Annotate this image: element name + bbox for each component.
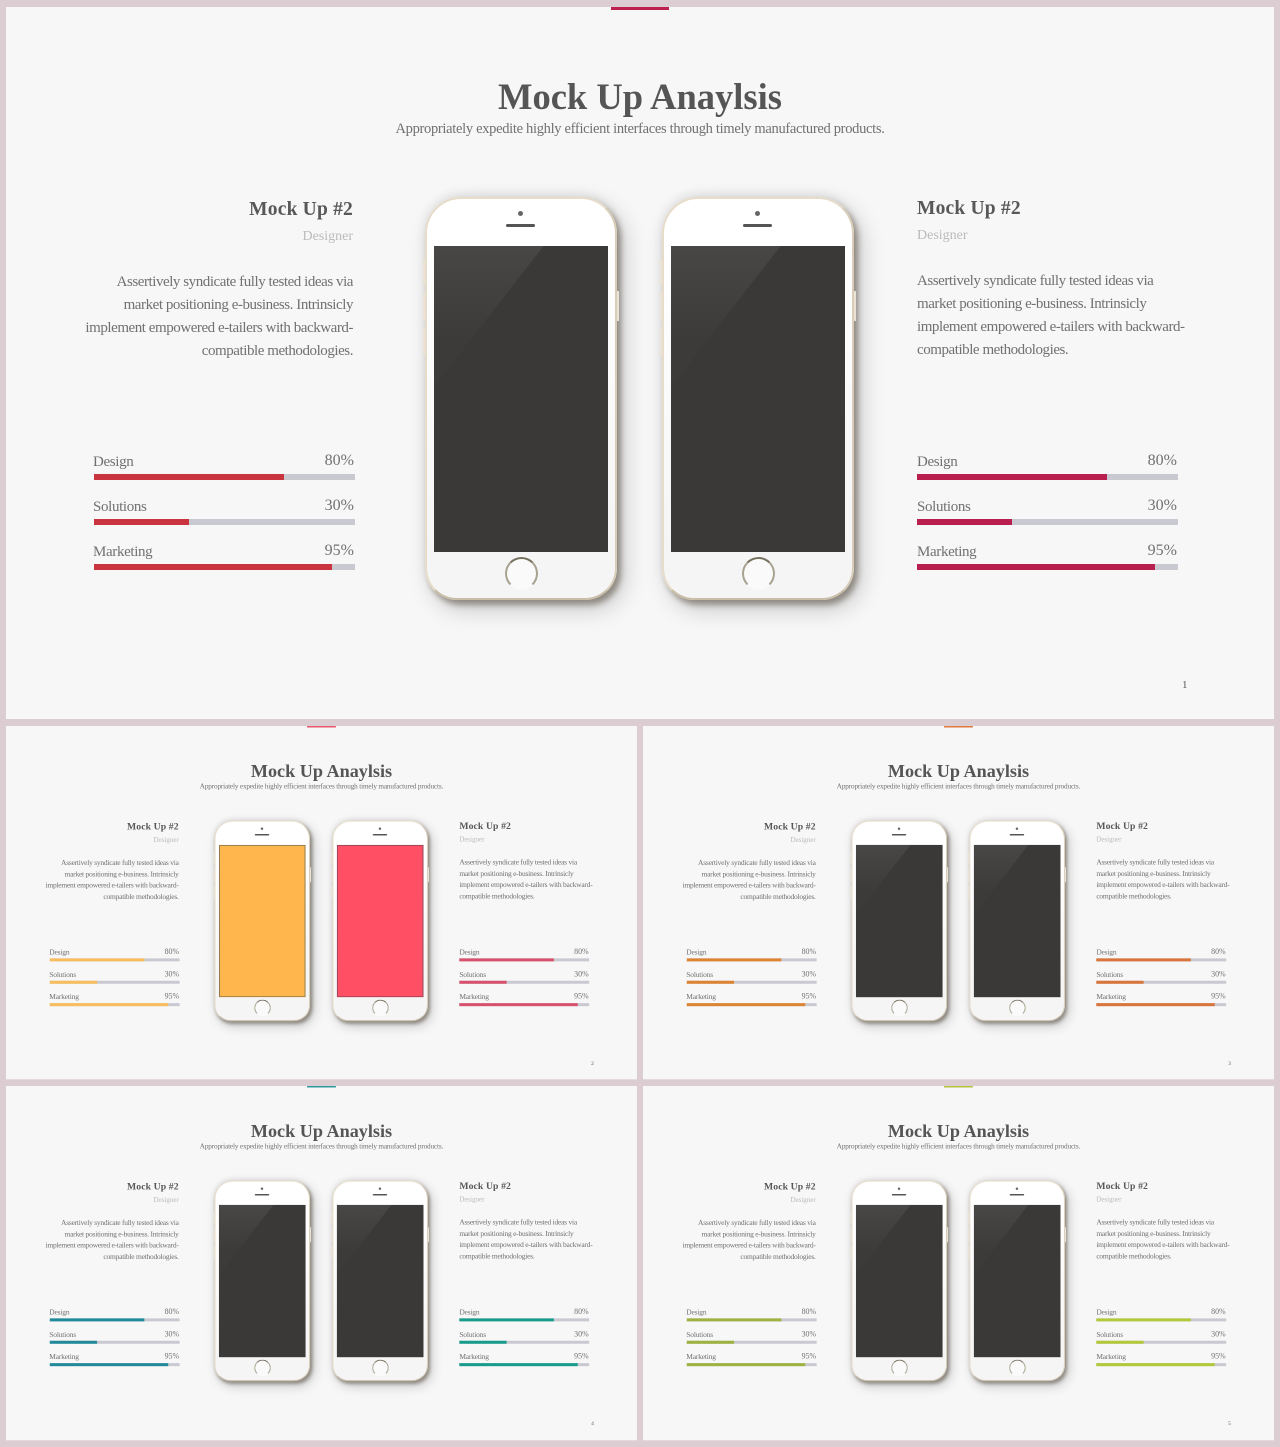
page number: 2 <box>591 1060 594 1066</box>
left profile text: implement empowered e-tailers with backward- <box>46 1242 179 1250</box>
right profile text: implement empowered e-tailers with backward- <box>459 1241 592 1249</box>
right profile text: Assertively syndicate fully tested ideas via <box>917 273 1153 289</box>
right skill bars <box>459 1307 590 1366</box>
subtitle: Appropriately expedite highly efficient interfaces through timely manufactured products. <box>837 1143 1080 1151</box>
left skill bars: 30% <box>165 970 179 978</box>
right skill bars: 95% <box>574 1352 589 1361</box>
phone mockup right <box>969 821 1065 1021</box>
left skill bars: 80% <box>802 1307 816 1316</box>
left profile text: market positioning e-business. Intrinsicly <box>702 1230 816 1238</box>
left profile text: Mock Up #2 <box>127 1182 179 1192</box>
right profile text <box>459 821 592 901</box>
right skill bars: Marketing <box>459 1353 489 1361</box>
page number: 5 <box>1228 1420 1231 1426</box>
accent tab <box>611 7 669 10</box>
panel: slide 4 <box>6 1086 637 1440</box>
left skill bars: Solutions <box>686 1331 713 1339</box>
page number: 1 <box>1182 679 1188 691</box>
left profile text: Assertively syndicate fully tested ideas via <box>698 859 816 867</box>
left skill bars <box>93 452 355 570</box>
left skill bars: Solutions <box>686 971 713 979</box>
phone mockup left <box>851 821 947 1021</box>
right profile text: Designer <box>1096 1196 1121 1203</box>
panel: slide 3 <box>643 726 1274 1079</box>
right profile text: market positioning e-business. Intrinsicly <box>917 296 1146 312</box>
phone mockup left <box>214 1181 310 1381</box>
right profile text <box>1096 1181 1230 1261</box>
left skill bars: Design <box>49 1308 69 1316</box>
left profile text <box>46 1182 179 1261</box>
right profile text: implement empowered e-tailers with backward- <box>459 881 592 889</box>
left profile text: Mock Up #2 <box>249 199 353 220</box>
right skill bars: 80% <box>1148 452 1177 469</box>
left skill bars <box>49 947 180 1006</box>
right skill bars: 80% <box>574 1307 589 1316</box>
phone mockup right <box>662 197 854 600</box>
left profile text <box>46 822 179 901</box>
left skill bars: 80% <box>165 1307 179 1316</box>
phone mockup with coral screen <box>332 821 428 1021</box>
right skill bars: 30% <box>1211 970 1226 978</box>
left profile text: market positioning e-business. Intrinsicly <box>65 1230 179 1238</box>
right profile text: Designer <box>1096 836 1121 843</box>
left skill bars: Design <box>686 1308 706 1316</box>
left skill bars: Solutions <box>49 971 76 979</box>
title: Mock Up Anaylsis <box>498 76 782 117</box>
right skill bars: Design <box>459 948 479 956</box>
left skill bars: 30% <box>325 497 354 514</box>
left skill bars: Solutions <box>49 1331 76 1339</box>
left profile text <box>682 822 816 901</box>
right skill bars: Design <box>1096 1308 1116 1316</box>
right profile text: Assertively syndicate fully tested ideas via <box>1096 1218 1214 1226</box>
right skill bars: 80% <box>1211 1307 1226 1316</box>
panel: slide 5 <box>643 1086 1274 1440</box>
right skill bars: 30% <box>574 1330 589 1338</box>
right skill bars <box>1096 947 1226 1006</box>
right profile text: market positioning e-business. Intrinsicly <box>459 1230 573 1238</box>
right profile text: compatible methodologies. <box>1096 1253 1172 1261</box>
left skill bars: Marketing <box>49 993 79 1001</box>
panel: slide 2 <box>6 726 637 1079</box>
right profile text: Mock Up #2 <box>1096 1181 1148 1191</box>
right skill bars: Solutions <box>917 499 971 515</box>
left profile text: implement empowered e-tailers with backward- <box>46 882 179 890</box>
left profile text: market positioning e-business. Intrinsicly <box>702 870 816 878</box>
right skill bars <box>1096 1307 1226 1366</box>
accent tab <box>307 1086 336 1087</box>
right skill bars: Solutions <box>459 971 486 979</box>
left profile text: market positioning e-business. Intrinsicly <box>124 297 353 313</box>
phone mockup with amber screen <box>214 821 310 1021</box>
left skill bars: Design <box>93 454 133 470</box>
right skill bars: Marketing <box>1096 1353 1126 1361</box>
left profile text <box>682 1182 816 1261</box>
left profile text: Assertively syndicate fully tested ideas via <box>61 859 179 867</box>
right skill bars: Design <box>459 1308 479 1316</box>
left skill bars: 95% <box>165 992 179 1001</box>
right skill bars: 80% <box>574 947 589 956</box>
right profile text: implement empowered e-tailers with backward- <box>1096 1241 1229 1249</box>
right profile text: Assertively syndicate fully tested ideas via <box>1096 858 1214 866</box>
right profile text: Mock Up #2 <box>459 1181 511 1191</box>
left profile text: implement empowered e-tailers with backward- <box>683 882 816 890</box>
left profile text: compatible methodologies. <box>740 893 816 901</box>
right profile text: Designer <box>917 228 968 243</box>
left profile text: compatible methodologies. <box>103 893 179 901</box>
right profile text: market positioning e-business. Intrinsicly <box>1096 1230 1210 1238</box>
left skill bars: 30% <box>802 1330 816 1338</box>
accent tab <box>944 1086 973 1087</box>
left skill bars: 80% <box>165 947 179 956</box>
left skill bars: Design <box>49 948 69 956</box>
right profile text: compatible methodologies. <box>459 1253 535 1261</box>
left profile text: implement empowered e-tailers with backward- <box>85 320 353 336</box>
left profile text: market positioning e-business. Intrinsicly <box>65 870 179 878</box>
right skill bars <box>459 947 590 1006</box>
right profile text: compatible methodologies. <box>1096 893 1172 901</box>
left profile text: Mock Up #2 <box>764 1182 816 1192</box>
right skill bars: Marketing <box>917 544 976 560</box>
right profile text: Mock Up #2 <box>459 821 511 831</box>
phone mockup right <box>969 1181 1065 1381</box>
right profile text: compatible methodologies. <box>459 893 535 901</box>
left profile text: compatible methodologies. <box>103 1253 179 1261</box>
title: Mock Up Anaylsis <box>888 1120 1029 1141</box>
left skill bars: 30% <box>802 970 816 978</box>
left skill bars: 95% <box>802 992 816 1001</box>
left profile text: Designer <box>154 1196 179 1204</box>
left profile text: Designer <box>791 1196 816 1204</box>
left skill bars <box>686 947 817 1006</box>
right profile text: Assertively syndicate fully tested ideas via <box>459 1218 577 1226</box>
right profile text: implement empowered e-tailers with backward- <box>1096 881 1229 889</box>
right profile text: Designer <box>459 836 484 843</box>
left profile text: Mock Up #2 <box>127 822 179 832</box>
title: Mock Up Anaylsis <box>251 1120 392 1141</box>
left skill bars: Marketing <box>93 544 152 560</box>
right skill bars: 80% <box>1211 947 1226 956</box>
left skill bars: Marketing <box>686 1353 716 1361</box>
page number: 3 <box>1228 1060 1231 1066</box>
right profile text: market positioning e-business. Intrinsicly <box>1096 870 1210 878</box>
left skill bars: 80% <box>802 947 816 956</box>
phone mockup left <box>425 197 617 600</box>
left skill bars <box>686 1307 817 1366</box>
left profile text: Assertively syndicate fully tested ideas via <box>698 1219 816 1227</box>
left profile text: implement empowered e-tailers with backward- <box>683 1242 816 1250</box>
left skill bars: Marketing <box>49 1353 79 1361</box>
left skill bars: Design <box>686 948 706 956</box>
left profile text: Mock Up #2 <box>764 822 816 832</box>
left profile text: Designer <box>302 229 353 244</box>
left skill bars <box>49 1307 180 1366</box>
right skill bars: Marketing <box>1096 993 1126 1001</box>
left skill bars: Solutions <box>93 499 147 515</box>
right skill bars: Solutions <box>459 1331 486 1339</box>
right skill bars: Marketing <box>459 993 489 1001</box>
right skill bars: Solutions <box>1096 1331 1123 1339</box>
right profile text: Designer <box>459 1196 484 1203</box>
left skill bars: 95% <box>325 542 354 559</box>
phone mockup left <box>851 1181 947 1381</box>
right profile text <box>459 1181 592 1261</box>
left profile text: Designer <box>154 836 179 844</box>
right skill bars: Solutions <box>1096 971 1123 979</box>
right profile text <box>1096 821 1230 901</box>
left profile text: Assertively syndicate fully tested ideas via <box>61 1219 179 1227</box>
right skill bars: Design <box>917 454 957 470</box>
subtitle: Appropriately expedite highly efficient interfaces through timely manufactured products. <box>200 1143 443 1151</box>
right profile text: compatible methodologies. <box>917 342 1068 358</box>
right skill bars: 95% <box>574 992 589 1001</box>
left skill bars: Marketing <box>686 993 716 1001</box>
right profile text <box>917 198 1185 358</box>
left profile text: compatible methodologies. <box>202 343 353 359</box>
left skill bars: 95% <box>165 1352 179 1361</box>
right profile text: Assertively syndicate fully tested ideas via <box>459 858 577 866</box>
right skill bars: 95% <box>1211 1352 1226 1361</box>
right skill bars: Design <box>1096 948 1116 956</box>
panel: slide 1 <box>6 7 1274 719</box>
right skill bars: 30% <box>1148 497 1177 514</box>
subtitle: Appropriately expedite highly efficient interfaces through timely manufactured products. <box>200 783 443 791</box>
left skill bars: 30% <box>165 1330 179 1338</box>
right skill bars: 30% <box>1211 1330 1226 1338</box>
subtitle: Appropriately expedite highly efficient interfaces through timely manufactured products. <box>837 783 1080 791</box>
title: Mock Up Anaylsis <box>251 760 392 781</box>
right skill bars: 30% <box>574 970 589 978</box>
accent tab <box>944 726 973 727</box>
right skill bars: 95% <box>1211 992 1226 1001</box>
right profile text: market positioning e-business. Intrinsicly <box>459 870 573 878</box>
right profile text: implement empowered e-tailers with backward- <box>917 319 1185 335</box>
phone mockup right <box>332 1181 428 1381</box>
left profile text <box>85 199 354 359</box>
right profile text: Mock Up #2 <box>1096 821 1148 831</box>
left skill bars: 95% <box>802 1352 816 1361</box>
right skill bars <box>917 452 1178 570</box>
left profile text: compatible methodologies. <box>740 1253 816 1261</box>
right skill bars: 95% <box>1148 542 1177 559</box>
page number: 4 <box>591 1420 594 1426</box>
left profile text: Assertively syndicate fully tested ideas via <box>117 274 353 290</box>
title: Mock Up Anaylsis <box>888 760 1029 781</box>
subtitle: Appropriately expedite highly efficient interfaces through timely manufactured products. <box>395 121 885 137</box>
accent tab <box>307 726 336 727</box>
right profile text: Mock Up #2 <box>917 198 1021 219</box>
left skill bars: 80% <box>325 452 354 469</box>
left profile text: Designer <box>791 836 816 844</box>
